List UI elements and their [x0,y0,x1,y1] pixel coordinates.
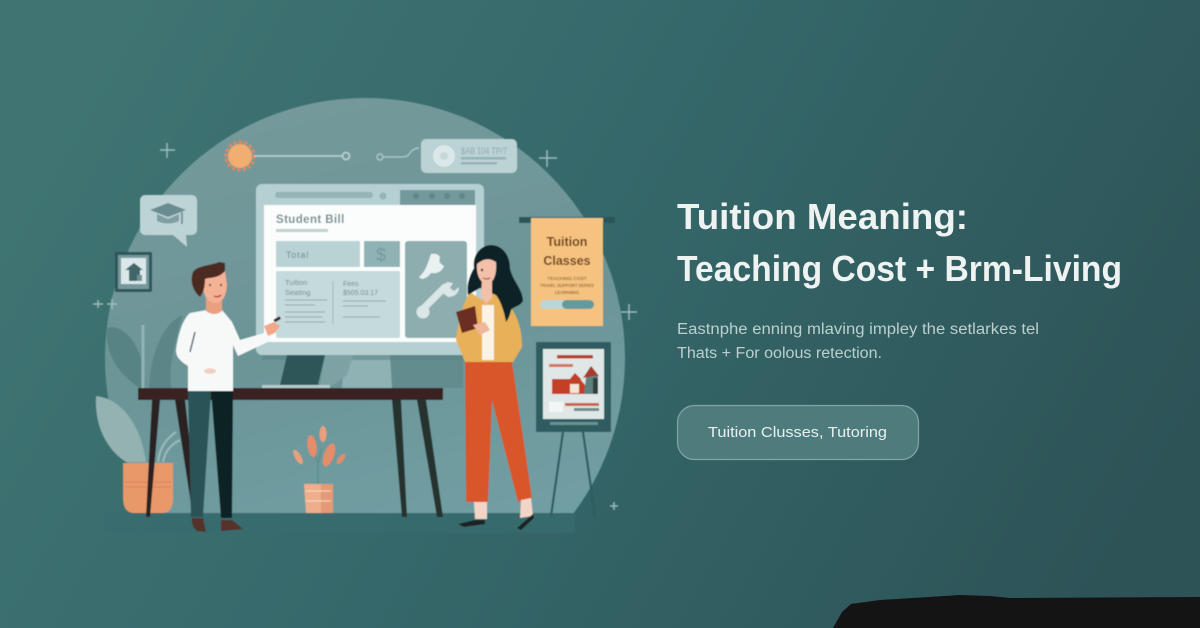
banner progress bar [540,300,594,309]
shirt [176,310,272,391]
description text: Thats + For oolous retection. [677,345,882,362]
monitor stand [385,355,463,388]
illustration scene [92,98,638,532]
button: Tuition Clusses, Tutoring [708,424,887,441]
bill heading: Student Bill [276,214,345,226]
computer monitor: Total [286,250,309,260]
plant pot: large [123,463,173,513]
plant: large leaves [96,315,183,462]
poster house [552,373,581,394]
trousers [465,362,532,502]
hair [467,245,523,322]
easel legs [551,432,595,516]
computer monitor: $ [376,245,386,265]
title: Tuition Meaning: [677,196,968,237]
title: Teaching Cost + Brm-Living [677,248,1122,289]
icon: sun gear [226,142,254,170]
trousers [188,390,211,517]
hand [473,322,490,335]
tablet [456,306,478,333]
easel poster [536,342,611,516]
neck and face [206,296,222,314]
banner sheet [531,218,603,326]
dark corner shape [833,595,1200,628]
details box [276,271,400,338]
banner rod [519,217,615,223]
connector line to card [377,148,419,160]
small plant [291,426,347,513]
woman figure [456,245,534,530]
monitor case [256,184,484,355]
dollar box [364,241,400,267]
laptop [320,355,353,385]
computer monitor: Tuition [285,278,307,287]
connector line to ring [254,152,350,160]
ankles and shoes [474,502,487,519]
tools box [405,241,467,338]
jacket [456,292,522,362]
title [677,196,1122,289]
screen [264,205,476,342]
sparkle crosses [93,143,637,510]
card amount: $AB 104 TP/7 [461,146,507,157]
tuition classes banner [519,217,615,326]
man figure [176,262,281,532]
poster sheet [543,349,604,419]
tuition classes banner: Classes [543,254,591,268]
table [138,388,443,517]
poster frame [536,342,611,432]
card icon [433,145,455,167]
neck [481,278,492,304]
total box [276,241,360,267]
icon: speech bubble with graduation cap [140,195,197,247]
hair [192,262,225,297]
icon: framed house [115,252,152,292]
banner small text: TEACHING COST [547,276,587,282]
tuition classes banner: TRAVEL SUPPORT SERIES [540,283,594,289]
hands [264,322,280,336]
computer monitor [256,184,484,388]
description text: Eastnphe enning mlaving impley the setlarkes tel [677,321,1039,338]
top [482,305,494,360]
shoes [192,518,206,532]
computer monitor: $505.03.17 [343,290,378,297]
banner title: Tuition [547,235,587,249]
amount card [421,139,517,173]
backdrop circle [104,98,626,514]
button [678,406,918,460]
face [477,259,496,284]
tuition classes banner: LEARNING [555,290,580,296]
computer monitor: Seating [285,288,310,297]
description text [677,321,1039,362]
floor band [105,513,575,533]
computer monitor: Fees [343,281,359,288]
